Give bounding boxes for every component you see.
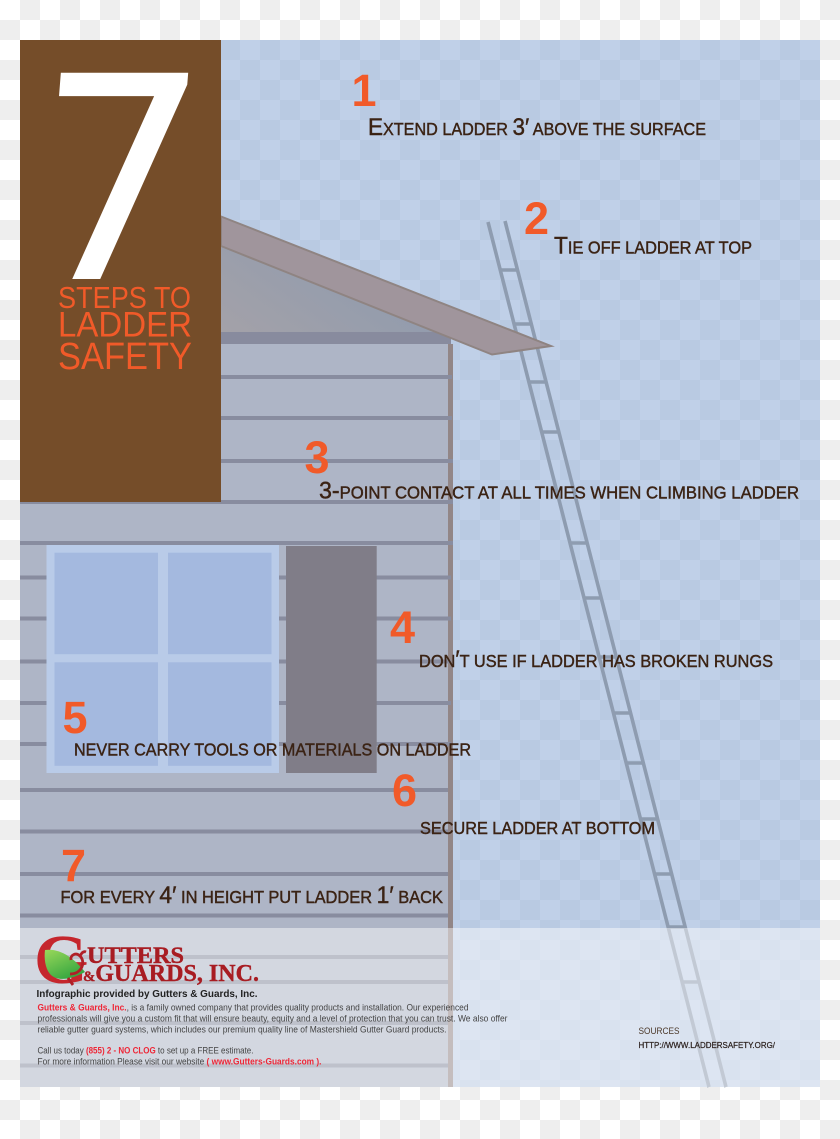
step 6: 6: [392, 765, 417, 816]
step 3: 3-POINT CONTACT AT ALL TIMES WHEN CLIMBING LADDER: [319, 477, 799, 504]
house wall: [20, 343, 449, 1087]
step 1: [352, 65, 706, 141]
step 3: [304, 432, 799, 504]
roof: [221, 216, 551, 354]
footer call to action: [38, 1046, 322, 1066]
logo letter G: G: [34, 922, 88, 999]
footer call to action: For more information Please visit our website ( www.Gutters-Guards.com ).: [38, 1056, 322, 1066]
logo wordmark line 1: UTTERS: [87, 943, 184, 968]
logo: Gutters & Guards, Inc.: [34, 922, 259, 999]
title line: safety: SAFETY: [58, 336, 192, 378]
panel: brown title block: [20, 40, 221, 502]
step 7: 7: [61, 840, 86, 891]
logo wordmark line 2: &GUARDS, INC.: [83, 960, 259, 987]
step 5: NEVER CARRY TOOLS OR MATERIALS ON LADDER: [74, 740, 471, 760]
step 1: EXTEND LADDER 3′ ABOVE THE SURFACE: [368, 114, 706, 141]
step 2: [524, 193, 752, 260]
window: [46, 545, 279, 773]
footer translucent panel: [20, 928, 820, 1087]
footer call to action: Call us today (855) 2 - NO CLOG to set up a FREE estimate.: [38, 1046, 254, 1056]
house gable: [221, 246, 450, 344]
logo leaf: [45, 950, 85, 979]
siding lines: [20, 375, 453, 1068]
step 4: [390, 602, 773, 673]
title: [17, 16, 216, 378]
step 4: 4: [390, 602, 415, 653]
step 2: 2: [524, 193, 549, 244]
sources: HTTP://WWW.LADDERSAFETY.ORG/: [638, 1040, 776, 1050]
door: [286, 546, 377, 773]
step 5: 5: [62, 692, 88, 743]
step 1: 1: [352, 65, 377, 116]
title line: steps to: STEPS TO: [58, 281, 191, 315]
step 6: [392, 765, 655, 838]
step 6: SECURE LADDER AT BOTTOM: [420, 818, 655, 838]
step 7: FOR EVERY 4′ IN HEIGHT PUT LADDER 1′ BACK: [60, 882, 443, 909]
logo swirl: [68, 952, 86, 985]
title line: ladder: LADDER: [58, 306, 192, 345]
step 4: DON′T USE IF LADDER HAS BROKEN RUNGS: [419, 646, 773, 673]
footer paragraph: [38, 1002, 508, 1034]
panel: house: [20, 246, 453, 1087]
house corner post: [448, 344, 453, 1087]
big numeral 7: 7: [17, 16, 216, 346]
icon: ladder: [488, 221, 726, 1087]
footer paragraph: professionals will give you a custom fit that will ensure beauty, equity and a level of protection that you can trust. We also offer: [38, 1014, 508, 1024]
step 3: 3: [304, 432, 330, 483]
footer heading: Infographic provided by Gutters & Guards, Inc.: [36, 989, 258, 1000]
sources: [638, 1026, 776, 1050]
footer paragraph: reliable gutter guard systems, which includes our premium quality line of Mastershield Gutter Guard products.: [38, 1024, 446, 1034]
house fascia: [221, 332, 451, 344]
footer company text: [36, 989, 508, 1066]
footer paragraph: Gutters & Guards, Inc., is a family owned company that provides quality products and installation. Our experienced: [38, 1002, 469, 1012]
step 5: [62, 692, 471, 760]
step 2: TIE OFF LADDER AT TOP: [554, 232, 752, 260]
sources: SOURCES: [638, 1026, 680, 1037]
step 7: [60, 840, 443, 909]
